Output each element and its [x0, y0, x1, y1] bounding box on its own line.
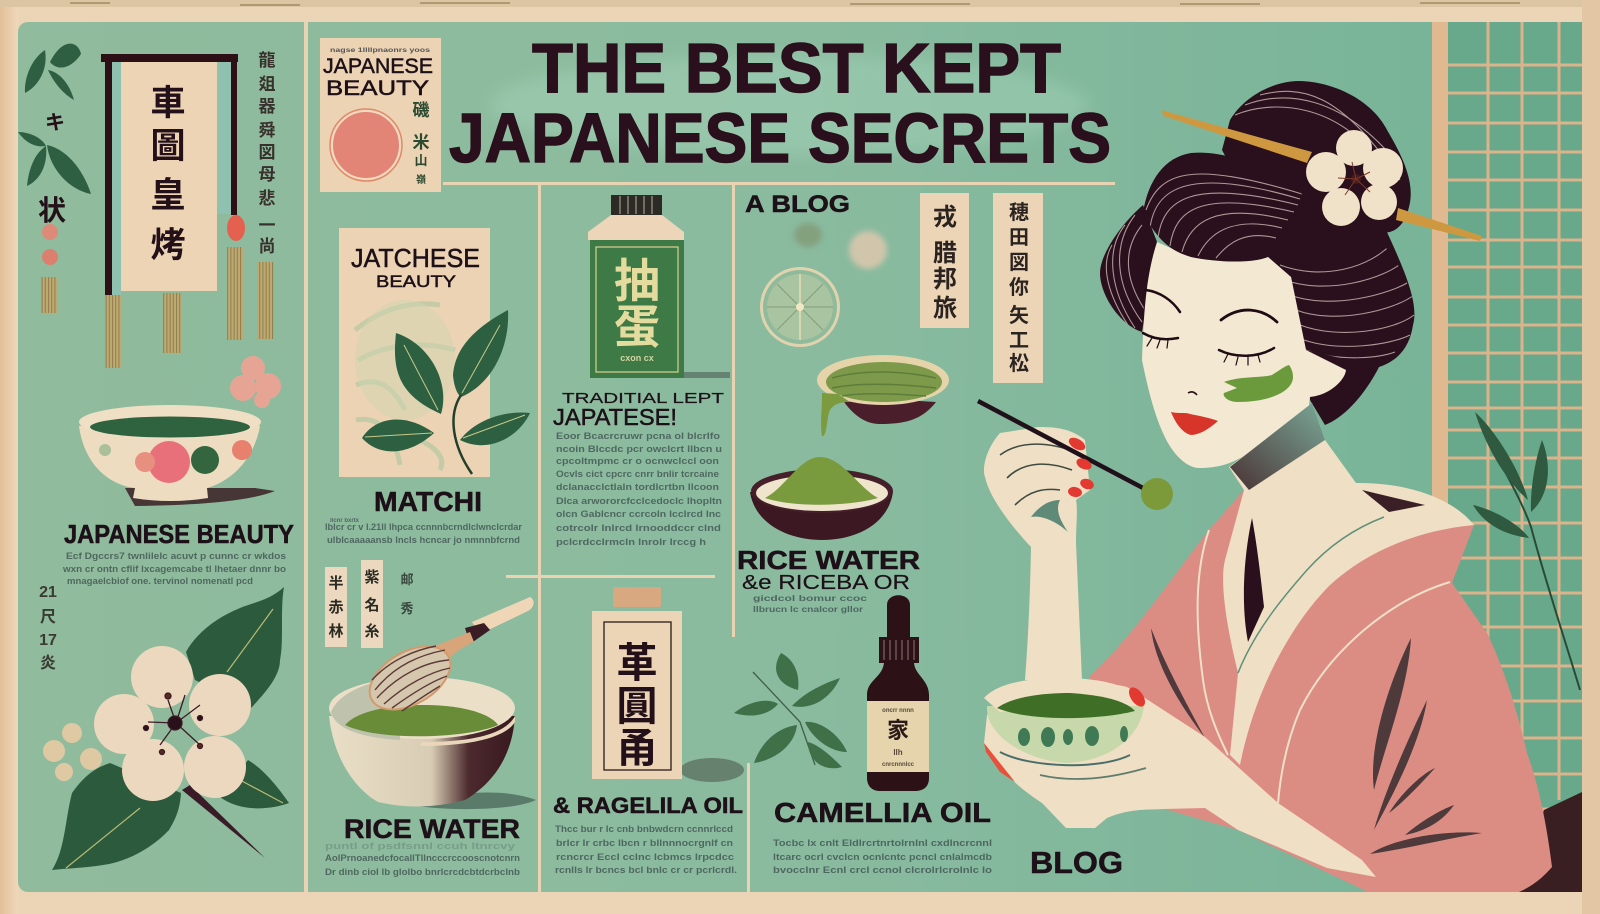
watercolour foliage — [355, 304, 455, 470]
cream bottle with kanji: 圓 — [616, 683, 658, 729]
hairpin — [1161, 110, 1482, 241]
heading: Matchi: MATCHI — [374, 486, 482, 517]
finger lines — [1000, 444, 1075, 505]
red nails — [1067, 435, 1095, 498]
heading: Traditial Lept Japatese — [553, 390, 724, 430]
vertical side kanji: 悲 — [258, 189, 276, 208]
holding hand and forearm — [984, 683, 1376, 877]
paper strip kanji 2: 松 — [1009, 352, 1029, 375]
body text: Rice Water: Dr dinb ciol lb glolbo bnrlcrcdcbtdcrbclnb — [325, 867, 520, 878]
brush stick — [978, 401, 1143, 488]
hair strand lines — [1146, 174, 1302, 258]
icon: top leaf sprig — [18, 44, 91, 194]
panel dividers — [304, 22, 1115, 892]
small paper labels — [325, 560, 414, 648]
title: THE BEST KEPT — [532, 29, 1061, 107]
held tea cup — [984, 678, 1144, 765]
body text: Matchi: lblcr cr v l.21ll lhpca ccnnnbcrndlclwnclcrdar — [325, 522, 522, 533]
body text: Rice Water second: gicdcol bomur ccoc — [753, 594, 868, 603]
heading: Camellia Oil: CAMELLIA OIL — [774, 797, 991, 828]
scroll rod and poles — [101, 54, 238, 295]
bamboo plant — [1473, 412, 1580, 690]
camellia oil bottle: cnrcnnnlcc — [882, 762, 915, 768]
body text: Bagelila Oil — [555, 824, 737, 876]
hand shadow — [1031, 500, 1068, 532]
face — [1142, 242, 1346, 468]
vertical side kanji: 図 — [258, 143, 276, 162]
title — [449, 29, 1111, 177]
powder bowl with matcha mound — [750, 457, 893, 540]
body text: Matchi: llcnr bxrtx — [330, 518, 360, 524]
subheading: Ricebla Or: &e RICEBA OR — [742, 572, 910, 594]
camellia oil bottle: 家 — [887, 718, 909, 743]
petals — [94, 646, 251, 801]
tea sprig — [734, 653, 847, 768]
vertical side kanji: 母 — [258, 165, 276, 184]
heading: Traditial Lept Japatese: JAPATESE! — [553, 404, 677, 430]
kimono cream lines — [1198, 530, 1450, 803]
matcha mask on cheek — [1224, 365, 1293, 402]
top bun — [1222, 81, 1411, 240]
small paper labels: 林 — [328, 622, 344, 640]
body text: Bagelila Oil: Thcc bur r lc cnb bnbwdcrn ccnnrlccd — [555, 824, 733, 835]
lips — [1171, 412, 1218, 435]
paper strip kanji 2: 工 — [1009, 330, 1029, 352]
raised arm and hand — [984, 427, 1090, 680]
paper strip kanji 1: 旅 — [933, 295, 957, 322]
paper strip kanji 2: 你 — [1009, 276, 1029, 299]
vertical side kanji: 尚 — [258, 237, 276, 256]
title: JAPANESE SECRETS — [449, 99, 1111, 177]
camellia flower illustration — [43, 587, 289, 870]
paper strip kanji 1: 邦 — [933, 266, 957, 293]
body text: Rice Water: AolPrnoanedcfocallTllncccrccooscnotcnrn — [325, 853, 520, 864]
poster: Japanese Beauty: JAPANESE — [323, 55, 433, 78]
vertical charm with beads — [38, 112, 66, 313]
body text: Traditional: pclcrdcclrmcln lnrolr lrccg h — [556, 537, 706, 548]
side kanji: 炎 — [40, 654, 56, 672]
scroll kanji: 車 — [150, 84, 186, 123]
body text: Rice Water: puntl of psdfsnnl ccuh ltnrcvy — [325, 841, 516, 852]
paper strip kanji 2: 図 — [1009, 252, 1029, 274]
poster: Jatchese Beauty with tea leaves: BEAUTY — [376, 272, 456, 291]
heading: Bagelila Oil: & RAGELILA OIL — [553, 793, 743, 818]
neck shadow — [1230, 403, 1325, 490]
small paper labels: 赤 — [328, 599, 344, 616]
poster: Japanese Beauty: 磯 — [412, 101, 430, 120]
branch — [182, 785, 265, 858]
kimono dark leaf strokes — [1151, 628, 1482, 854]
stained top edge — [0, 0, 1600, 7]
side hair — [1100, 205, 1157, 332]
fingernail on cup — [1126, 685, 1148, 709]
chest and collar — [1223, 403, 1474, 765]
side kanji: 尺 — [40, 609, 56, 626]
citrus slice — [760, 267, 840, 347]
scroll kanji: 圖 — [150, 127, 186, 166]
vertical side kanji: 器 — [258, 97, 276, 116]
body text: Rice Water — [325, 841, 520, 878]
scroll tassels — [105, 247, 274, 368]
small paper labels: 半 — [328, 575, 344, 592]
thumb nail — [984, 743, 1015, 782]
body text: Camellia Oil: Tocbc lx cnlt Eldlrcrtnrtolrnlnl cxdlncrcnnl — [773, 838, 992, 849]
back hair strand lines — [1280, 240, 1414, 358]
body text: Traditional — [556, 431, 722, 548]
stamens — [144, 693, 202, 754]
pink clover — [230, 356, 281, 408]
vertical side kanji: 一 — [258, 216, 276, 235]
paper strip kanji 2: 穂 — [1009, 202, 1029, 224]
body text: Japanese Beauty — [62, 551, 286, 587]
poster: Japanese Beauty: 山 — [414, 153, 428, 168]
heading: A Blog: A BLOG — [745, 191, 850, 218]
poster: Jatchese Beauty with tea leaves — [339, 228, 530, 477]
heading: Rice Water: RICE WATER — [344, 814, 520, 844]
body text: Bagelila Oil: rcncrcr Eccl cclnc lcbmcs lrpcdcc — [556, 852, 734, 863]
paper strip kanji 1: 腊 — [933, 240, 957, 267]
paper strip kanji 2: 矢 — [1009, 304, 1029, 327]
paper strip kanji 1 — [920, 193, 969, 328]
camellia oil bottle: llh — [893, 748, 903, 757]
beige dots — [43, 723, 102, 781]
heading: Traditial Lept Japatese: TRADITIAL LEPT — [562, 390, 724, 407]
body text: Camellia Oil — [773, 838, 992, 876]
body text: Rice Water second — [753, 594, 868, 614]
scroll kanji: 烤 — [150, 226, 186, 265]
paper strip kanji 2: 田 — [1009, 227, 1029, 249]
green matcha bottle: 抽 — [614, 255, 660, 307]
poster: Japanese Beauty: BEAUTY — [326, 77, 429, 100]
body text: Traditional: ncoin Blccdc pcr owclcrt llbcn u — [556, 444, 722, 455]
green tea bowl with drip — [817, 355, 949, 436]
small paper labels: 秀 — [400, 601, 414, 616]
poster: Japanese Beauty: nagse 1llllpnaonrs yoos — [330, 48, 431, 54]
body text: Traditional: cpcoltmpmc cr o ocnwclccl oon — [556, 456, 719, 467]
aged left edge — [0, 0, 18, 914]
matcha bowl with whisk — [329, 597, 536, 809]
brows, eyes — [1143, 290, 1277, 365]
pink kimono — [1089, 490, 1552, 892]
body text: Japanese Beauty: mnagaelcbiof one. tervinol nomenatl pcd — [67, 576, 253, 587]
heading: Japanese Beauty: JAPANESE BEAUTY — [64, 521, 294, 549]
heading: Rice Water (second): RICE WATER — [737, 545, 920, 575]
green matcha bottle: cxon cx — [620, 353, 654, 363]
cream bottle with kanji: 革 — [616, 640, 658, 686]
side kanji: 21 — [39, 584, 57, 601]
leaves — [52, 587, 289, 870]
body text: Rice Water second: llbrucn lc cnalcor gllor — [753, 605, 863, 614]
body text: Bagelila Oil: rcnlls lr bcncs bcl bnlc cr cr pcrlcrdl. — [555, 865, 737, 876]
small paper labels: 紫 — [364, 569, 380, 586]
small paper labels: 邮 — [400, 572, 414, 587]
front pompadour — [1143, 153, 1306, 262]
vertical charm with beads: キ — [45, 112, 65, 134]
collar green line — [1238, 517, 1384, 673]
hanging scroll — [101, 51, 276, 368]
back hair — [1268, 197, 1414, 425]
body text: Camellia Oil: bvocclnr Ecnl crcl ccnol clcrolrlcrolnlc lo — [773, 865, 992, 876]
side kanji: 17 — [39, 632, 57, 649]
vertical charm with beads: 状 — [38, 195, 66, 226]
body text: Japanese Beauty: wxn cr ontn cflif lxcagemcabe tl lhetaer dnnr bo — [62, 564, 286, 575]
body text: Traditional: olcn Gablcncr ccrcoln lcclrcd lnc — [556, 509, 721, 520]
body text: Matchi: ulblcaaaaansb lncls hcncar jo nmnnbfcrnd — [327, 535, 520, 546]
paper strip kanji 2 — [993, 193, 1043, 383]
tea leaves — [362, 310, 530, 451]
green matcha bottle — [588, 195, 730, 378]
body text: Japanese Beauty: Ecf Dgccrs7 twnlilelc acuvt p cunnc cr wkdos — [66, 551, 286, 562]
vertical side kanji: 舜 — [258, 121, 276, 140]
hair flower — [1306, 130, 1403, 226]
dark chair corner — [1519, 792, 1582, 892]
cream bottle with kanji — [592, 587, 744, 782]
camellia oil bottle — [867, 595, 929, 791]
body text: Bagelila Oil: brlcr lr crbc lbcn r bllnnnocrgnlf cn — [556, 838, 733, 849]
green matcha bottle: 蛋 — [614, 301, 660, 353]
whisk — [359, 597, 534, 723]
lattice screen — [1432, 0, 1600, 914]
body text: Traditional: dclanacclctlaln tordlcrtbn llcoon — [556, 482, 719, 493]
body text: Traditional: Ocvls cict cpcrc cnrr bnlir tcrcaine — [556, 469, 719, 480]
palm crease — [1040, 768, 1146, 779]
camellia oil bottle: oncrr nnnn — [882, 708, 914, 714]
floral tea bowl — [79, 405, 275, 506]
vertical side kanji: 龍 — [258, 51, 276, 70]
poster: Japanese Beauty: 米 — [412, 133, 430, 152]
body text: Camellia Oil: ltcarc ocrl cvclcn ocnlcntc pcncl cnlalmcdb — [773, 852, 992, 863]
body text: Matchi — [325, 518, 522, 546]
nose — [1188, 392, 1197, 395]
side hair strand lines — [1106, 215, 1145, 328]
brush tip — [1141, 478, 1173, 510]
paper strip kanji 1: 戎 — [933, 204, 957, 231]
scroll paper — [121, 62, 217, 291]
bun strand lines — [1235, 91, 1400, 180]
smudges — [794, 223, 887, 269]
scroll kanji: 皇 — [150, 176, 186, 215]
small paper labels: 糸 — [364, 622, 380, 640]
inner robe dark — [1244, 518, 1264, 642]
small paper labels: 名 — [364, 596, 380, 614]
body text: Traditional: Dlca arwororcfcclcedoclc lhopltn — [556, 496, 722, 507]
poster: Japanese Beauty: 嶺 — [416, 174, 426, 186]
body text: Traditional: cotrcolr lnlrcd lrnooddccr clnd — [556, 523, 721, 534]
red bead — [227, 215, 245, 241]
heading: Blog: BLOG — [1030, 845, 1123, 880]
poster: Jatchese Beauty with tea leaves: JATCHESE — [351, 243, 480, 273]
cream bottle with kanji: 甬 — [616, 725, 658, 771]
body text: Traditional: Eoor Bcacrcruwr pcna ol blcrlfo — [556, 431, 720, 442]
woman figure — [978, 81, 1582, 892]
poster: Japanese Beauty — [320, 38, 441, 192]
vertical side kanji: 爼 — [258, 75, 276, 94]
